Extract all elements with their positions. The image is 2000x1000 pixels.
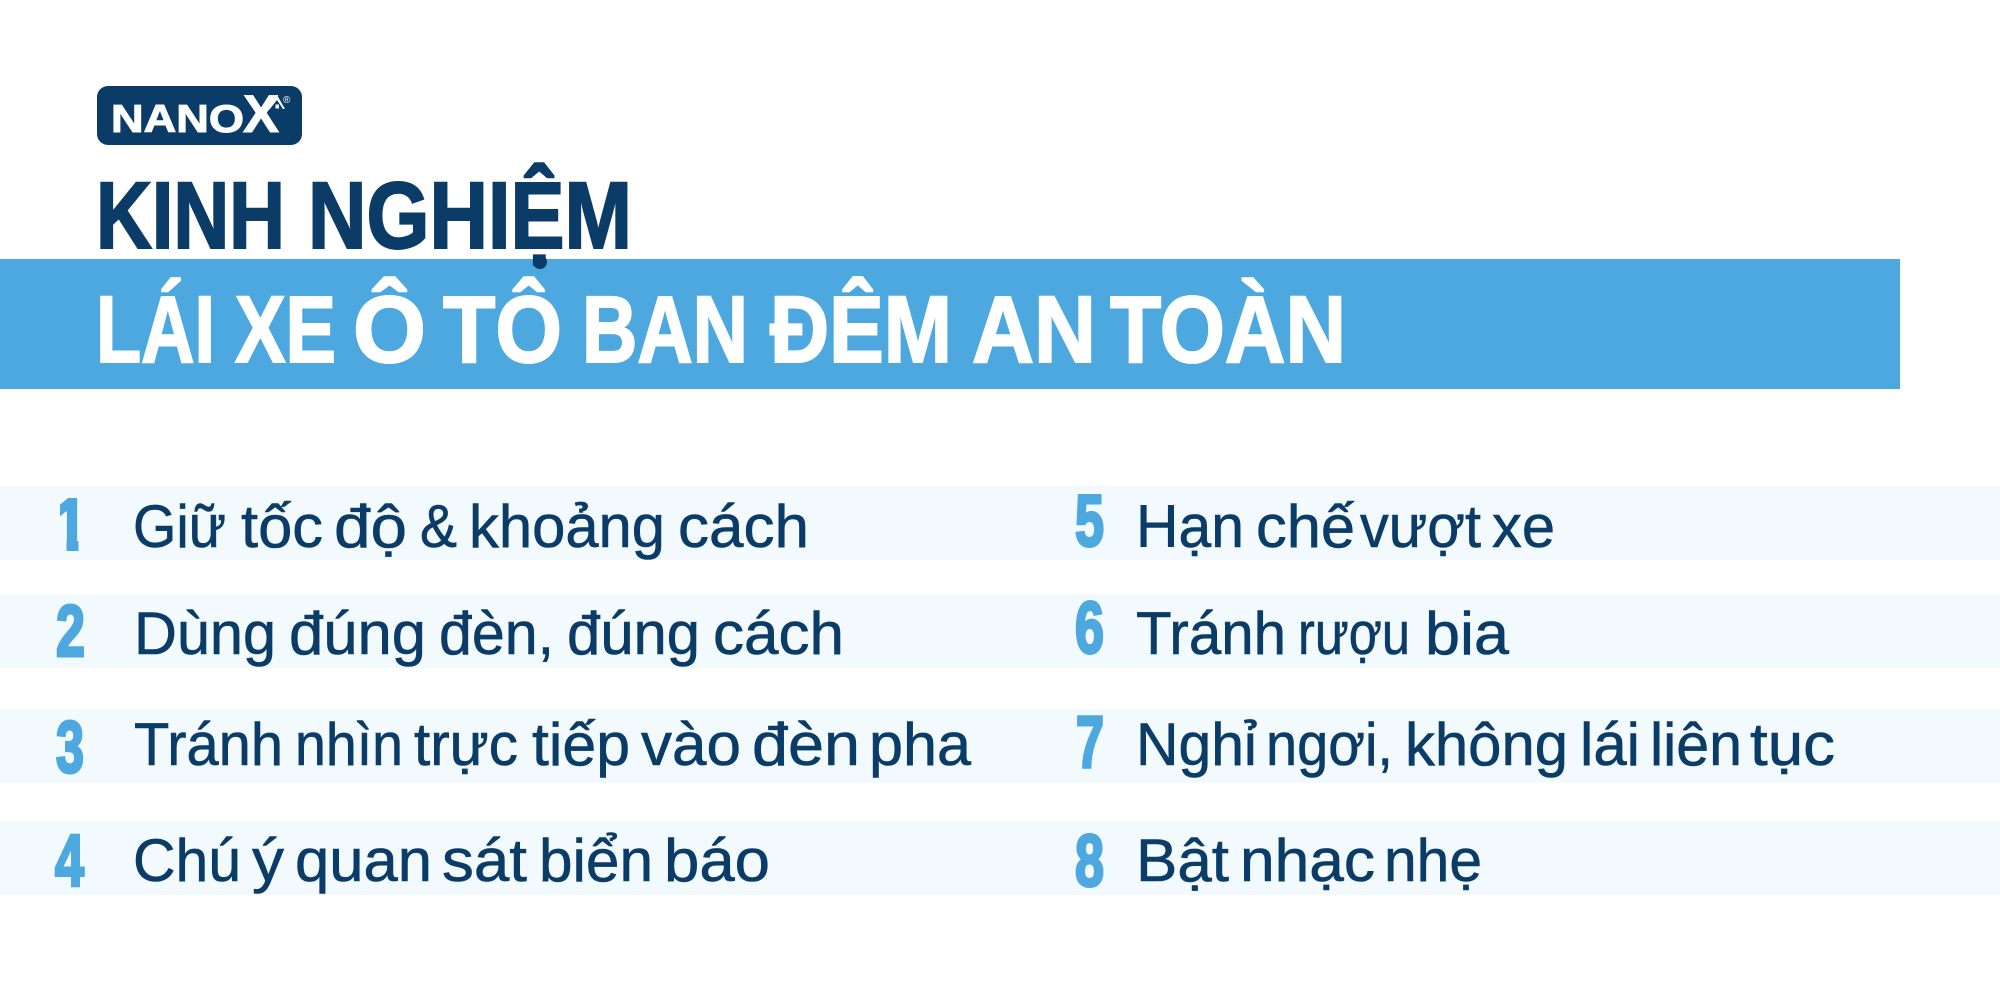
heading: line 1: KINH (96, 163, 285, 269)
heading: line 2: AN (972, 277, 1096, 383)
item 4: quan (295, 827, 432, 894)
item 3: vào (641, 711, 741, 778)
item 7: 7 (1076, 702, 1104, 783)
item 2: Dùng (134, 600, 276, 667)
item 8: 8 (1075, 821, 1104, 902)
item 6: Tránh (1136, 600, 1286, 667)
item 5: xe (1492, 493, 1555, 560)
item 7: Nghỉ (1136, 711, 1257, 778)
item 1: khoảng (469, 493, 665, 560)
item 8 (1075, 821, 1482, 902)
item 4: báo (664, 827, 770, 894)
heading: line 2: TÔ (443, 277, 562, 383)
item 5 (1075, 481, 1555, 562)
item 1: 1 (55, 485, 87, 566)
item 7: không (1405, 711, 1568, 778)
item 5: vượt (1360, 493, 1481, 560)
item 1: độ (334, 493, 407, 560)
item 3 (56, 707, 972, 788)
heading: line 2: XE (235, 277, 336, 383)
item 5: Hạn (1136, 493, 1244, 560)
item 4: 4 (55, 821, 84, 902)
item 4: sát (442, 827, 527, 894)
heading: line 2 (96, 277, 1346, 383)
item 2: đúng (567, 600, 700, 667)
heading: line 2: LÁI (96, 277, 215, 383)
item 3: Tránh (134, 711, 283, 778)
item 4 (55, 821, 770, 902)
item 1: tốc (241, 493, 323, 560)
item 8: nhẹ (1384, 827, 1482, 894)
heading: line 2: Ô (353, 277, 426, 383)
item 8: Bật (1136, 827, 1229, 894)
item 2: cách (713, 600, 844, 667)
title band (0, 259, 1900, 389)
heading: line 2: BAN (582, 277, 748, 383)
item 7: liên (1650, 711, 1742, 778)
item 7: ngơi, (1266, 711, 1393, 778)
item 3: tiếp (532, 711, 630, 778)
item 3: nhìn (295, 711, 403, 778)
item 1: cách (678, 493, 809, 560)
item 6 (1075, 588, 1510, 669)
item 3: trực (414, 711, 518, 778)
item 4: biển (539, 827, 653, 894)
item 2: đúng (289, 600, 426, 667)
logo: NanoX badge: X (243, 85, 279, 144)
item 5: chế (1256, 493, 1355, 560)
item 6: bia (1425, 600, 1510, 667)
item 6: 6 (1075, 588, 1104, 669)
heading: line 1: NGHIỆM (308, 163, 632, 269)
item 1: & (420, 493, 457, 560)
item 7: lái (1580, 711, 1640, 778)
heading: line 2: TOÀN (1110, 277, 1346, 383)
item 3: đèn (752, 711, 860, 778)
item 6: rượu (1298, 600, 1410, 667)
row 4 background (0, 821, 2000, 895)
item 3: 3 (56, 707, 84, 788)
item 3: pha (869, 711, 972, 778)
heading: line 1 (96, 163, 632, 269)
item 7 (1076, 702, 1835, 783)
logo: NanoX badge: ® (283, 95, 291, 106)
item 1 (60, 498, 806, 560)
item 8: nhạc (1240, 827, 1375, 894)
item 4: ý (252, 827, 284, 894)
row 2 background (0, 594, 2000, 668)
item 2 (56, 591, 844, 672)
item 2: đèn, (439, 600, 554, 667)
logo: NanoX badge: NANO (111, 98, 244, 141)
item 5: 5 (1075, 481, 1104, 562)
row 1 background (0, 486, 2000, 560)
item 4: Chú (133, 827, 241, 894)
item 7: tục (1750, 711, 1835, 778)
heading: line 2: ĐÊM (770, 277, 952, 383)
item 2: 2 (56, 591, 85, 672)
logo: NanoX badge (97, 85, 302, 145)
item 1: Giữ (133, 493, 226, 560)
row 3 background (0, 709, 2000, 783)
